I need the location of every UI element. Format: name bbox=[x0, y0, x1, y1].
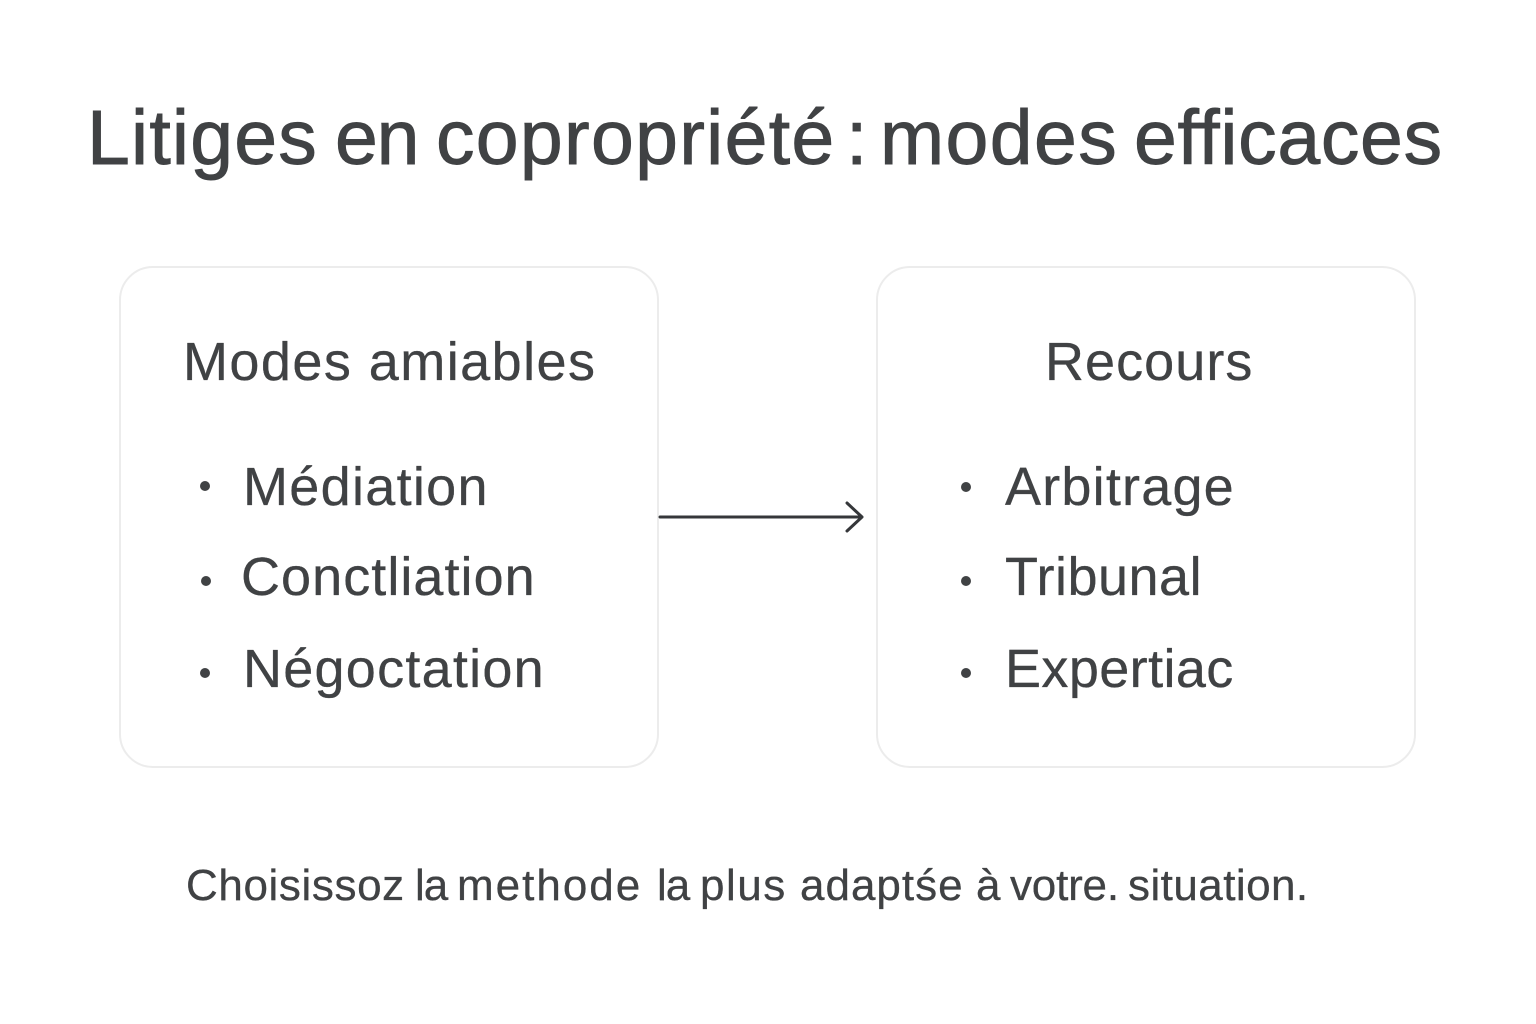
bullet bbox=[200, 481, 210, 491]
footer note: Choisissoz bbox=[186, 861, 405, 910]
bullet bbox=[201, 576, 211, 586]
list item: expertise: Expertiac bbox=[1005, 639, 1234, 699]
title: copropriété bbox=[436, 95, 836, 181]
title: Litiges bbox=[87, 95, 318, 181]
title bbox=[87, 95, 1443, 181]
footer note: methode bbox=[457, 861, 642, 910]
list item: négociation: Négoctation bbox=[243, 639, 545, 699]
title: modes bbox=[880, 95, 1118, 181]
footer note: adaptśe bbox=[800, 861, 964, 910]
list item: conciliation: Conctliation bbox=[241, 547, 536, 607]
list item: médiation: Médiation bbox=[243, 457, 489, 517]
title: efficaces bbox=[1134, 95, 1443, 181]
bullet bbox=[961, 668, 971, 678]
footer note: la bbox=[415, 861, 447, 910]
footer note: la bbox=[657, 861, 689, 910]
bullet bbox=[200, 668, 210, 678]
list item: tribunal: Tribunal bbox=[1005, 547, 1202, 607]
footer note: situation. bbox=[1128, 861, 1309, 910]
footer note: votre. bbox=[1010, 861, 1119, 910]
panel: recours bbox=[876, 266, 1416, 768]
title: : bbox=[846, 95, 867, 181]
arrow bbox=[658, 501, 864, 533]
bullet bbox=[961, 482, 971, 492]
bullet bbox=[961, 576, 971, 586]
footer note bbox=[186, 861, 1309, 910]
list item: arbitrage: Arbitrage bbox=[1005, 457, 1235, 517]
footer note: plus bbox=[700, 861, 787, 910]
title: en bbox=[335, 95, 418, 181]
footer note: à bbox=[976, 861, 1000, 910]
heading: modes amiables: Modes amiables bbox=[183, 332, 596, 392]
panel: modes amiables bbox=[119, 266, 659, 768]
heading: recours: Recours bbox=[1045, 332, 1253, 392]
